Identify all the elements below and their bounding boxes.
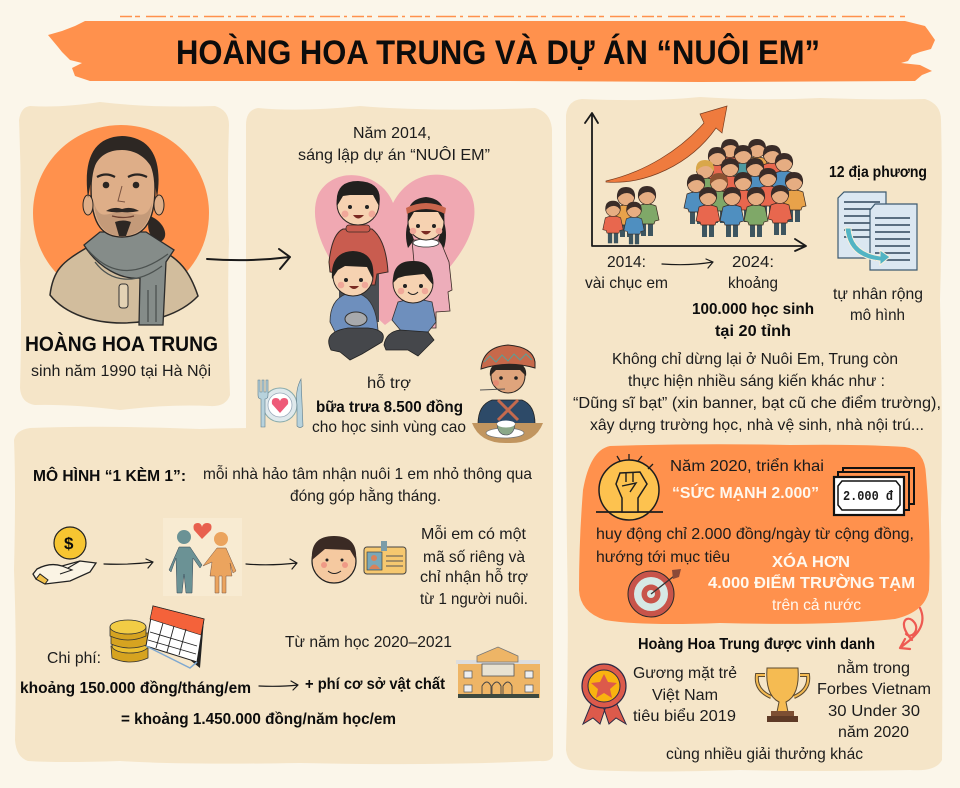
campaign goal: 4.000 ĐIỂM TRƯỜNG TẠM [708,573,915,592]
support text: cho học sinh vùng cao [312,419,466,436]
campaign name: “SỨC MẠNH 2.000” [672,483,819,502]
icon: couple holding hands [163,518,242,596]
icon: banknotes [834,468,914,515]
callout: 2000 strength campaign [579,444,930,624]
arrow: profile to project [207,249,290,269]
forbes award text: nằm trong [837,658,910,677]
campaign goal: XÓA HƠN [772,552,850,571]
growth chart [585,106,806,251]
boy in red sweater [329,181,388,322]
timeline labels: 2014: [607,254,646,271]
illustration: highland girl eating [472,345,543,443]
icon: trophy [757,668,808,722]
timeline labels: vài chục em [585,275,668,292]
icon: hand with coin [33,527,96,584]
other initiatives text [573,351,941,434]
support text: bữa trưa 8.500 đồng [316,399,463,416]
founding text [298,125,490,164]
replication text: tự nhân rộng [833,286,923,303]
forbes award text: 30 Under 30 [828,703,920,720]
medal award text: Việt Nam [652,687,718,704]
seated boy with bowl [329,251,383,360]
child id text: chỉ nhận hỗ trợ [420,567,529,586]
panel: impact and honours [566,97,942,772]
timeline labels: 100.000 học sinh [692,301,814,318]
crowd of children [684,139,806,237]
campaign heading: Năm 2020, triển khai [670,457,824,475]
title banner [48,16,935,82]
founding text: sáng lập dự án “NUÔI EM” [298,145,490,164]
campaign description: hướng tới mục tiêu [596,549,730,566]
child id text: Mỗi em có một [421,524,527,543]
icon: target [628,569,681,617]
medal award text: Gương mặt trẻ [633,665,737,682]
icon: plate with heart [258,379,303,428]
arrow [259,681,298,690]
other initiatives text: thực hiện nhiều sáng kiến khác như : [628,373,885,390]
forbes award text [817,658,931,741]
annual cost: = khoảng 1.450.000 đồng/năm học/em [121,711,396,728]
child id text: từ 1 người nuôi. [420,591,528,608]
icon: duplicated documents [838,192,917,270]
icon: coins and calendar [110,606,204,668]
child id text [420,524,529,608]
medal award text [633,665,737,725]
icon: red squiggle arrow [900,608,922,649]
panel: project founding [246,106,553,443]
school year text: Từ năm học 2020–2021 [285,634,452,651]
icon: hand with coin: $ [64,534,74,553]
replication text [833,286,923,324]
timeline labels: tại 20 tỉnh [715,323,791,340]
children in heart illustration [315,175,474,360]
honours heading: Hoàng Hoa Trung được vinh danh [638,636,875,653]
child id text: mã số riêng và [423,549,525,566]
icon: banknotes: 2.000 đ [843,489,894,505]
seated boy [384,261,436,356]
icon: child with id card [312,536,406,583]
icon: raised fist [596,454,663,520]
monthly cost: khoảng 150.000 đồng/tháng/em [20,680,251,697]
timeline labels: khoảng [728,275,778,292]
person name: HOÀNG HOA TRUNG [25,333,218,356]
support text [312,373,466,436]
few children group [603,186,659,244]
support text: hỗ trợ [367,373,412,392]
campaign description [596,526,914,566]
campaign goal: trên cả nước [772,597,861,614]
icon: medal [582,664,626,724]
timeline labels: 2024: [732,254,774,271]
localities heading: 12 địa phương [829,164,927,181]
birth info: sinh năm 1990 tại Hà Nội [31,363,211,380]
model description [203,464,532,505]
model description: mỗi nhà hảo tâm nhận nuôi 1 em nhỏ thông qua [203,464,532,483]
title text: HOÀNG HOA TRUNG VÀ DỰ ÁN “NUÔI EM” [176,33,820,72]
forbes award text: Forbes Vietnam [817,681,931,698]
chart axes [585,113,806,251]
panel: profile [19,102,230,410]
model description: đóng góp hằng tháng. [290,486,441,505]
panel: one-to-one model [14,427,553,764]
timeline labels [585,254,814,340]
founding text: Năm 2014, [353,125,431,142]
other initiatives text: xây dựng trường học, nhà vệ sinh, nhà nội trú... [590,417,924,434]
other initiatives text: “Dũng sĩ bạt” (xin banner, bạt cũ che điểm trường), [573,394,941,412]
model heading: MÔ HÌNH “1 KÈM 1”: [33,466,186,485]
campaign goal [708,552,915,614]
arrow [104,559,153,568]
cost label: Chi phí: [47,650,101,667]
arrow [246,559,297,569]
campaign description: huy động chỉ 2.000 đồng/ngày từ cộng đồng, [596,526,914,543]
girl in pink dress [406,197,452,328]
forbes award text: năm 2020 [838,724,909,741]
icon: school building [456,647,540,698]
replication text: mô hình [850,307,905,324]
other initiatives text: Không chỉ dừng lại ở Nuôi Em, Trung còn [612,351,898,368]
other awards text: cùng nhiều giải thưởng khác [666,746,863,763]
portrait illustration [33,125,209,325]
growth arrow [606,106,727,182]
facility fee: + phí cơ sở vật chất [305,676,446,693]
medal award text: tiêu biểu 2019 [633,707,736,725]
